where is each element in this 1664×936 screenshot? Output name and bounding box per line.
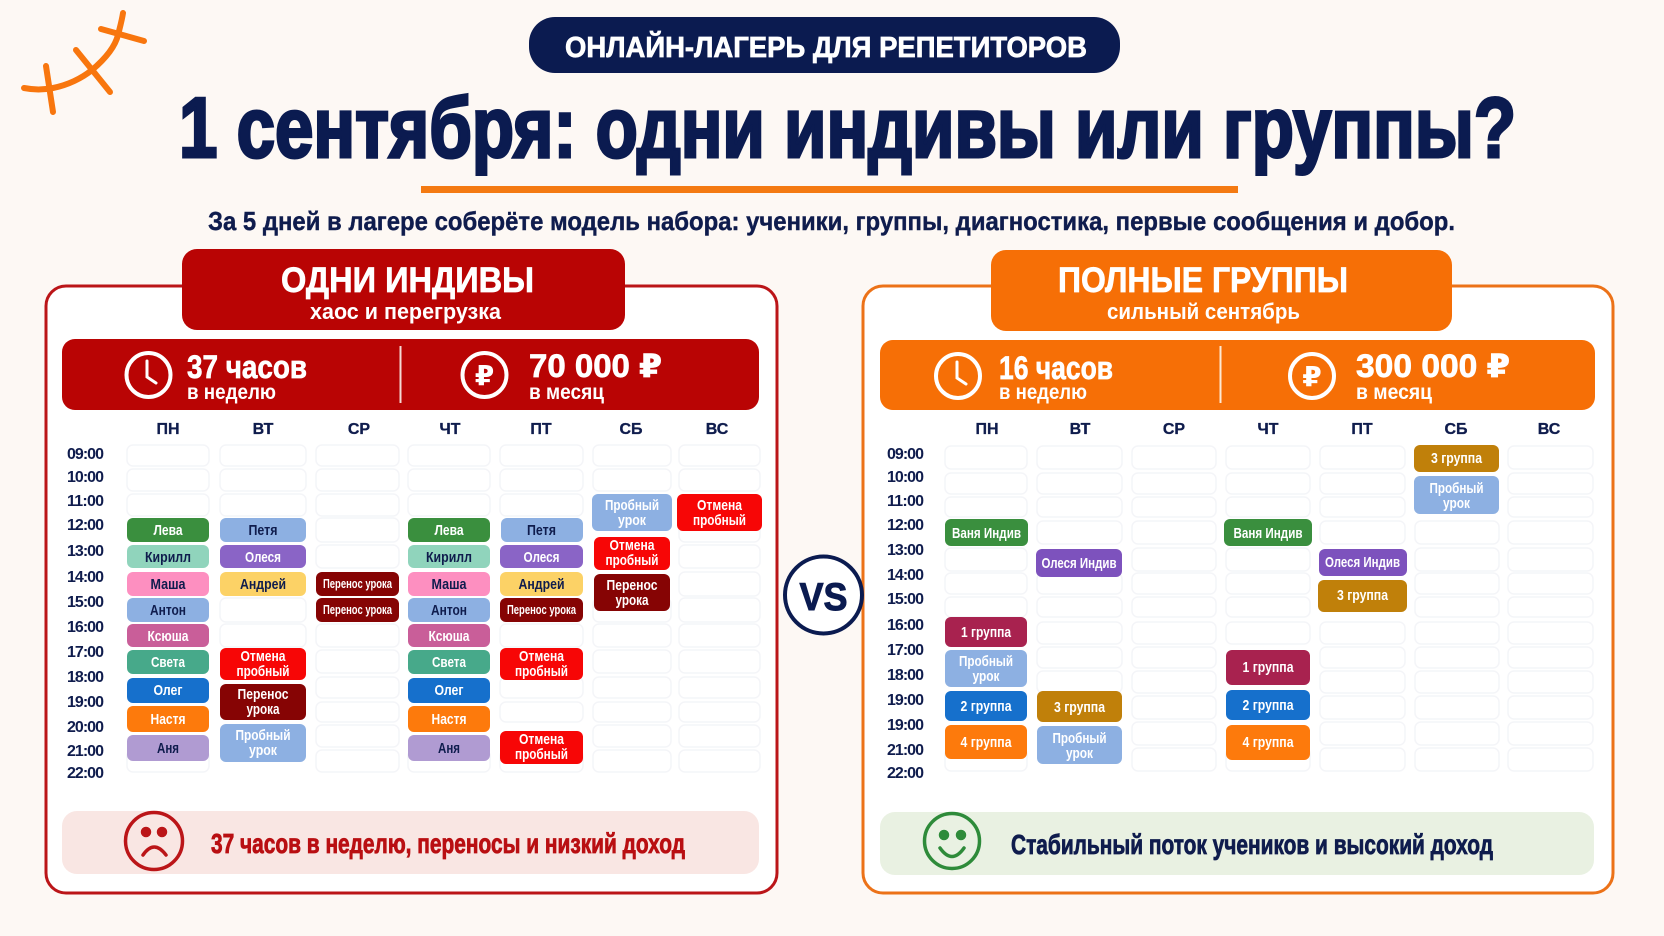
- tuesday lessons: Андрей: [240, 576, 286, 593]
- thursday lessons: [408, 518, 490, 761]
- stat bar: hours and income: [880, 340, 1595, 410]
- thursday lessons: Олег: [434, 682, 464, 699]
- tuesday lessons: урок: [1066, 745, 1093, 762]
- tuesday lessons: [220, 518, 306, 762]
- icon: orange doodle: [24, 13, 144, 112]
- friday lessons: 3 группа: [1337, 587, 1389, 604]
- panel heading: одни индивы: хаос и перегрузка: [310, 299, 502, 324]
- tuesday lessons: Олеся Индив: [1042, 555, 1116, 572]
- stat: income: в месяц: [529, 381, 604, 404]
- schedule empty cells: [945, 446, 1593, 771]
- tuesday lessons: урок: [249, 742, 277, 759]
- schedule time labels: 12:00: [67, 517, 104, 534]
- panel heading: одни индивы: ОДНИ ИНДИВЫ: [281, 261, 534, 300]
- icon: sad face: [126, 812, 182, 870]
- panel heading: полные группы: ПОЛНЫЕ ГРУППЫ: [1058, 261, 1348, 300]
- thursday lessons: 2 группа: [1242, 697, 1294, 714]
- tuesday lessons: урока: [246, 701, 280, 718]
- schedule day headers: [975, 421, 1561, 438]
- schedule day headers: СБ: [1444, 421, 1468, 438]
- saturday lessons: Пробный: [605, 497, 659, 514]
- tuesday lessons: 3 группа: [1054, 699, 1106, 716]
- stat: income: в месяц: [1356, 381, 1432, 404]
- monday lessons: Света: [151, 654, 186, 671]
- schedule day headers: ЧТ: [439, 421, 461, 438]
- tuesday lessons: Пробный: [1052, 730, 1106, 747]
- wednesday lessons: Перенос урока: [323, 576, 393, 591]
- callout: bad result: 37 часов в неделю, переносы и низкий доход: [211, 828, 685, 859]
- tuesday lessons: Олеся: [245, 549, 281, 566]
- schedule time labels: 17:00: [67, 644, 104, 661]
- monday lessons: Ксюша: [148, 628, 189, 645]
- thursday lessons: Кирилл: [426, 549, 472, 566]
- schedule day headers: ВС: [706, 421, 729, 438]
- thursday lessons: [1224, 519, 1312, 760]
- saturday lessons: [1414, 445, 1499, 514]
- monday lessons: [127, 518, 209, 761]
- saturday lessons: Пробный: [1430, 480, 1484, 497]
- callout: good result: [880, 812, 1594, 875]
- icon: smiling face: [924, 814, 980, 868]
- stat: hours: [187, 349, 307, 404]
- schedule time labels: 10:00: [67, 469, 104, 486]
- icon: ruble: [1290, 354, 1334, 398]
- stat: hours: [999, 350, 1113, 404]
- schedule time labels: 13:00: [887, 542, 924, 559]
- sunday lessons: [677, 494, 762, 531]
- tuesday lessons: Пробный: [236, 727, 290, 744]
- thursday lessons: Лева: [434, 522, 464, 539]
- vs badge: VS: [800, 576, 848, 619]
- schedule day headers: СБ: [619, 421, 643, 438]
- friday lessons: Олеся: [524, 549, 560, 566]
- schedule day headers: ПН: [975, 421, 999, 438]
- schedule day headers: ПТ: [1351, 421, 1373, 438]
- friday lessons: пробный: [515, 746, 568, 763]
- schedule day headers: ЧТ: [1257, 421, 1279, 438]
- thursday lessons: Антон: [431, 602, 467, 619]
- schedule time labels: 20:00: [67, 719, 104, 736]
- monday lessons: 2 группа: [960, 698, 1012, 715]
- icon: clock: [126, 353, 170, 397]
- schedule day headers: ПТ: [530, 421, 552, 438]
- tuesday lessons: [1036, 549, 1122, 764]
- sunday lessons: пробный: [693, 512, 746, 529]
- icon: ruble: ₽: [475, 360, 494, 391]
- monday lessons: Маша: [150, 576, 186, 593]
- schedule time labels: 19:00: [887, 692, 924, 709]
- schedule time labels: 11:00: [887, 493, 924, 510]
- stat: hours: в неделю: [999, 381, 1087, 404]
- panel: одни индивы: [46, 249, 777, 893]
- thursday lessons: 1 группа: [1242, 659, 1294, 676]
- schedule time labels: 15:00: [887, 591, 924, 608]
- schedule time labels: 11:00: [67, 493, 104, 510]
- panel heading: одни индивы: [182, 249, 625, 330]
- saturday lessons: [592, 494, 672, 611]
- schedule time labels: 21:00: [887, 742, 924, 759]
- schedule time labels: 10:00: [887, 469, 924, 486]
- stat: income: 300 000 ₽: [1356, 348, 1510, 384]
- schedule day headers: СР: [348, 421, 370, 438]
- stat: income: 70 000 ₽: [529, 348, 662, 384]
- schedule time labels: 18:00: [887, 667, 924, 684]
- friday lessons: пробный: [515, 663, 568, 680]
- panel heading: полные группы: [991, 250, 1452, 331]
- thursday lessons: Ксюша: [428, 628, 470, 645]
- schedule empty cells: [127, 445, 760, 772]
- schedule time labels: 22:00: [887, 765, 924, 782]
- schedule time labels: 22:00: [67, 765, 104, 782]
- saturday lessons: пробный: [606, 552, 658, 569]
- schedule day headers: ВТ: [1070, 421, 1091, 438]
- stat: income: [529, 348, 662, 404]
- monday lessons: Кирилл: [145, 549, 191, 566]
- monday lessons: 1 группа: [961, 624, 1012, 641]
- friday lessons: [1318, 549, 1407, 612]
- schedule time labels: 19:00: [67, 694, 104, 711]
- saturday lessons: Отмена: [610, 537, 655, 554]
- callout: bad result: [62, 811, 759, 874]
- wednesday lessons: [316, 572, 399, 622]
- icon: ruble: ₽: [1302, 361, 1322, 392]
- friday lessons: Андрей: [518, 576, 564, 593]
- schedule day headers: [156, 421, 729, 438]
- thursday lessons: 4 группа: [1242, 734, 1294, 751]
- thursday lessons: Настя: [432, 711, 466, 728]
- monday lessons: Аня: [157, 740, 179, 757]
- monday lessons: Олег: [154, 682, 182, 699]
- schedule time labels: 17:00: [887, 642, 924, 659]
- thursday lessons: Ваня Индив: [1234, 525, 1302, 542]
- vs badge: [785, 556, 862, 634]
- friday lessons: Отмена: [519, 731, 565, 748]
- panel heading: полные группы: сильный сентябрь: [1107, 299, 1300, 324]
- monday lessons: урок: [972, 668, 1000, 685]
- callout: good result: Стабильный поток учеников и высокий доход: [1011, 829, 1493, 860]
- sunday lessons: Отмена: [697, 497, 743, 514]
- schedule day headers: СР: [1163, 421, 1185, 438]
- schedule day headers: ВТ: [253, 421, 274, 438]
- schedule time labels: [67, 446, 104, 782]
- thursday lessons: Маша: [432, 576, 467, 593]
- stat: hours: в неделю: [187, 381, 276, 404]
- saturday lessons: урок: [1443, 495, 1470, 512]
- monday lessons: Пробный: [959, 653, 1013, 670]
- monday lessons: 4 группа: [960, 734, 1012, 751]
- title underline: [421, 186, 1238, 193]
- friday lessons: Петя: [527, 522, 556, 539]
- saturday lessons: Перенос: [606, 577, 658, 594]
- saturday lessons: урока: [616, 592, 649, 609]
- schedule time labels: 15:00: [67, 594, 104, 611]
- schedule time labels: 13:00: [67, 543, 104, 560]
- stat: hours: 37 часов: [187, 349, 307, 385]
- monday lessons: Ваня Индив: [952, 525, 1021, 542]
- subtitle: За 5 дней в лагере соберёте модель набора: ученики, группы, диагностика, первые сообщения и добор.: [208, 206, 1455, 236]
- schedule time labels: 16:00: [887, 617, 924, 634]
- friday lessons: Перенос урока: [507, 602, 577, 617]
- schedule time labels: [887, 446, 924, 782]
- top label pill: [529, 17, 1120, 73]
- tuesday lessons: пробный: [236, 663, 290, 680]
- friday lessons: [500, 518, 583, 764]
- schedule time labels: 19:00: [887, 717, 924, 734]
- schedule time labels: 16:00: [67, 619, 104, 636]
- stat: hours: 16 часов: [999, 350, 1113, 386]
- schedule day headers: ВС: [1538, 421, 1561, 438]
- friday lessons: Олеся Индив: [1325, 554, 1400, 571]
- schedule time labels: 09:00: [887, 446, 924, 463]
- friday lessons: Отмена: [519, 648, 565, 665]
- tuesday lessons: Петя: [248, 522, 278, 539]
- icon: clock: [936, 354, 980, 398]
- monday lessons: [945, 519, 1028, 759]
- schedule time labels: 14:00: [887, 567, 924, 584]
- monday lessons: Антон: [150, 602, 186, 619]
- schedule time labels: 12:00: [887, 517, 924, 534]
- stat bar: hours and income: [62, 339, 759, 410]
- monday lessons: Лева: [154, 522, 183, 539]
- saturday lessons: урок: [618, 512, 646, 529]
- wednesday lessons: Перенос урока: [323, 602, 393, 617]
- tuesday lessons: Отмена: [240, 648, 286, 665]
- schedule time labels: 18:00: [67, 669, 104, 686]
- schedule day headers: ПН: [156, 421, 180, 438]
- monday lessons: Настя: [150, 711, 186, 728]
- stat: income: [1356, 348, 1510, 404]
- panel: полные группы: [863, 250, 1613, 893]
- schedule time labels: 21:00: [67, 743, 104, 760]
- thursday lessons: Аня: [438, 740, 460, 757]
- saturday lessons: 3 группа: [1431, 450, 1483, 467]
- icon: ruble: [462, 353, 506, 397]
- tuesday lessons: Перенос: [238, 686, 288, 703]
- schedule time labels: 14:00: [67, 569, 104, 586]
- top label pill: ОНЛАЙН-ЛАГЕРЬ ДЛЯ РЕПЕТИТОРОВ: [565, 30, 1087, 64]
- thursday lessons: Света: [432, 654, 467, 671]
- schedule time labels: 09:00: [67, 446, 104, 463]
